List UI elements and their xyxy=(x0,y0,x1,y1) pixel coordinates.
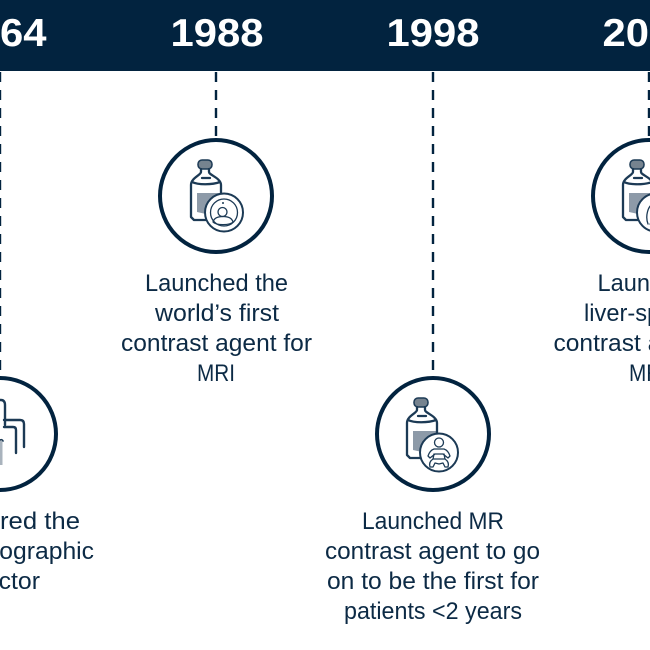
header band xyxy=(0,0,650,71)
connector 1988 xyxy=(215,72,217,138)
text: 1998 milestone: on to be the first for xyxy=(327,568,539,595)
text: 1988 milestone: contrast agent for xyxy=(121,330,312,357)
connector 1964 xyxy=(0,72,1,378)
icon: bottle with adult patient badge xyxy=(160,140,272,252)
text: 1988 milestone: Launched the xyxy=(145,270,288,297)
text: 1988 milestone xyxy=(121,270,312,387)
connector 1998 xyxy=(432,72,434,378)
text: 1998 milestone: Launched MR xyxy=(362,508,504,535)
text: 1998 milestone: patients <2 years xyxy=(344,598,522,625)
year: 1988: 1988 xyxy=(170,12,264,55)
icon: angiographic injector xyxy=(0,378,56,490)
icon: bottle with liver badge xyxy=(593,140,650,252)
year: 1998: 1998 xyxy=(386,12,480,55)
text: 2005 milestone xyxy=(554,270,650,387)
text: 1998 milestone: contrast agent to go xyxy=(325,538,540,565)
text: 1998 milestone xyxy=(325,508,540,625)
text: 1964 milestone xyxy=(0,508,94,595)
text: 1988 milestone: MRI xyxy=(197,360,235,387)
connector 2005 xyxy=(648,72,650,138)
icon: bottle with baby badge xyxy=(377,378,489,490)
text: 1988 milestone: world’s first xyxy=(154,300,279,327)
